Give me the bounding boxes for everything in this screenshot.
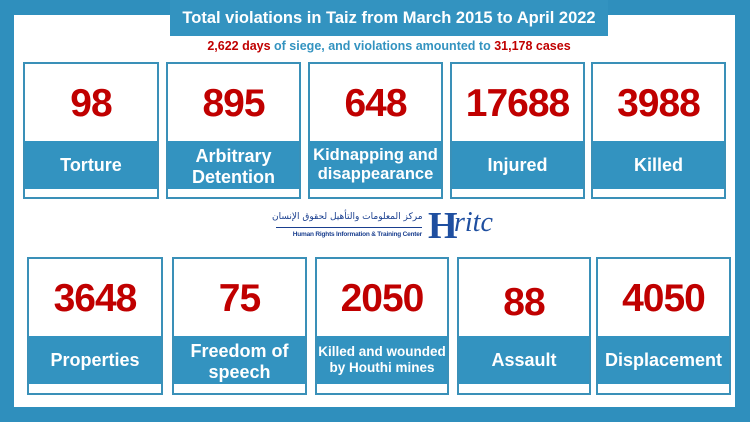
card: assault: 88 — [503, 281, 545, 324]
card: mines: Killed and wounded — [318, 344, 446, 359]
card: torture: 98 — [70, 82, 112, 125]
card: injured: Injured — [487, 155, 548, 175]
card: assault: Assault — [491, 350, 557, 370]
card: freedom of speech: speech — [208, 362, 271, 382]
card: freedom of speech: 75 — [219, 277, 260, 320]
card: torture: Torture — [60, 155, 122, 175]
card: mines — [315, 257, 449, 395]
card: properties: Properties — [50, 350, 140, 370]
card: freedom of speech — [172, 257, 307, 395]
card: displacement — [596, 257, 731, 395]
title — [170, 0, 608, 36]
card: injured — [450, 62, 585, 199]
card: mines: by Houthi mines — [329, 360, 434, 375]
subtitle: 2,622 days of siege, and violations amounted to 31,178 cases — [207, 39, 571, 53]
card: arbitrary detention: Arbitrary — [195, 146, 272, 166]
card: properties — [27, 257, 163, 395]
card: killed — [591, 62, 726, 199]
title: Total violations in Taiz from March 2015 to April 2022 — [182, 8, 596, 26]
logo: H — [428, 205, 458, 247]
card: killed: Killed — [634, 155, 683, 175]
card: mines: 2050 — [341, 277, 423, 320]
card: freedom of speech: Freedom of — [190, 341, 288, 361]
logo — [272, 205, 493, 247]
card: displacement: 4050 — [622, 277, 705, 320]
card: kidnapping: Kidnapping and — [313, 146, 438, 164]
card: arbitrary detention: 895 — [202, 82, 265, 125]
card: kidnapping: 648 — [344, 82, 407, 125]
card: arbitrary detention: Detention — [192, 167, 275, 187]
card: assault — [457, 257, 591, 395]
card: kidnapping: disappearance — [318, 165, 433, 183]
card: injured: 17688 — [466, 82, 569, 125]
card: kidnapping — [308, 62, 443, 199]
card: arbitrary detention — [166, 62, 301, 199]
card: properties: 3648 — [54, 277, 136, 320]
card: displacement: Displacement — [605, 350, 722, 370]
logo: ritc — [454, 207, 493, 238]
logo: مركز المعلومات والتأهيل لحقوق الإنسان — [272, 212, 423, 222]
card: killed: 3988 — [617, 82, 700, 125]
card: torture — [23, 62, 159, 199]
logo: Human Rights Information & Training Center — [293, 231, 422, 238]
